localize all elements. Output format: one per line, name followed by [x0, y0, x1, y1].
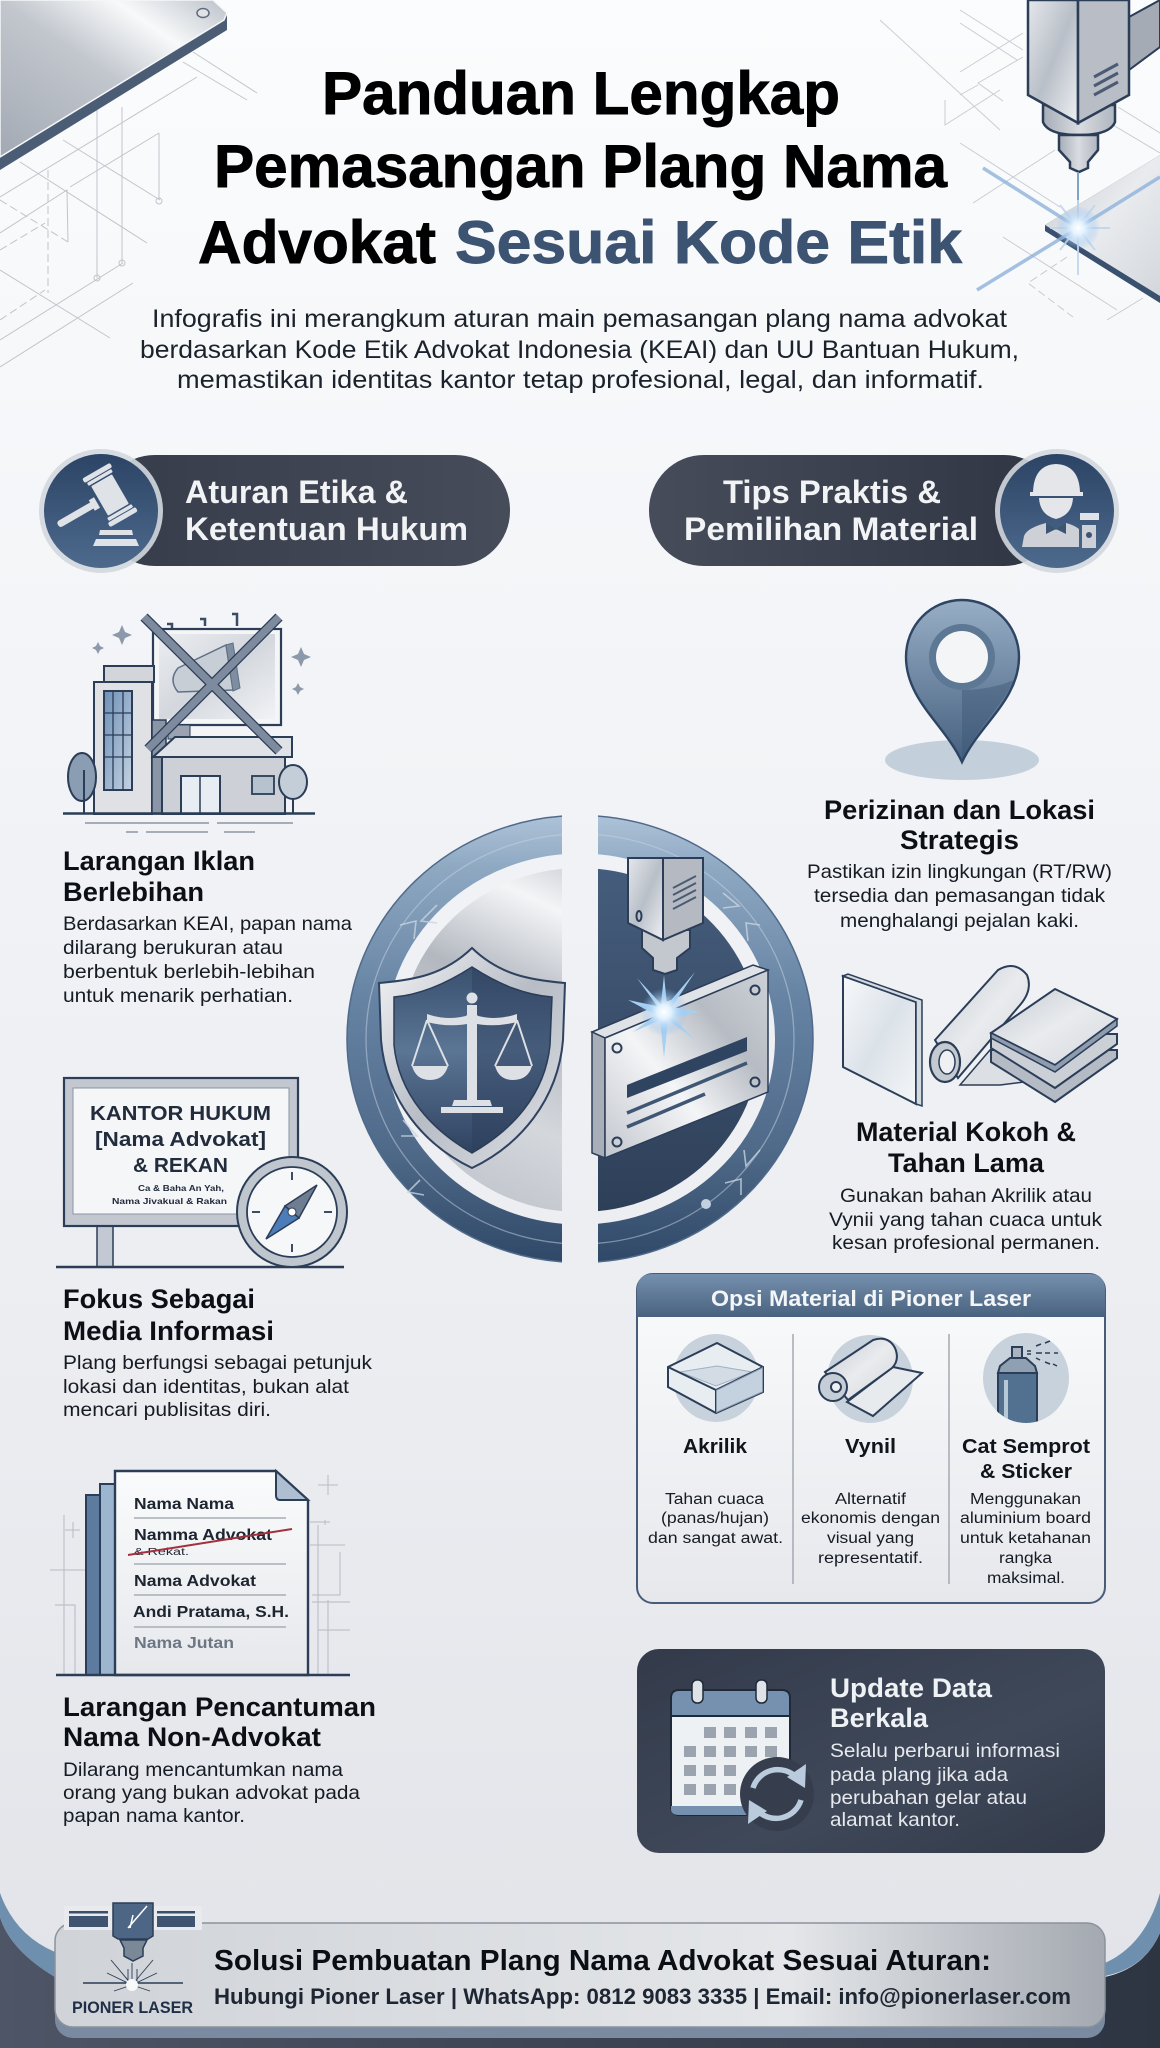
option: acrylic: Tahan cuaca — [665, 1491, 764, 1508]
text block: Larangan Iklan Berlebihan: Berdasarkan KEAI, papan nama — [63, 913, 352, 935]
option: acrylic — [648, 1334, 783, 1547]
panel: update data: Update Data — [830, 1673, 993, 1703]
engraved metal plate — [592, 965, 768, 1158]
option: spray paint and sticker: aluminium board — [960, 1510, 1091, 1527]
title: Sesuai Kode Etik — [455, 209, 963, 276]
icon: name list document: Nama Nama — [134, 1496, 234, 1513]
text block: Material Kokoh: Vynii yang tahan cuaca untuk — [829, 1209, 1102, 1231]
icon: location pin — [885, 600, 1039, 780]
icon: name list document: Nama Advokat — [134, 1573, 256, 1590]
option: acrylic: dan sangat awat. — [648, 1530, 783, 1547]
text block: Perizinan dan Lokasi Strategis: Pastikan izin lingkungan (RT/RW) — [807, 861, 1112, 883]
panel: update data: alamat kantor. — [830, 1809, 960, 1831]
title — [198, 60, 963, 276]
section header: Tips Praktis: Tips Praktis & — [723, 474, 941, 510]
text block: Larangan Iklan Berlebihan: Larangan Iklan — [63, 846, 255, 876]
icon: office sign with compass: KANTOR HUKUM — [90, 1103, 271, 1125]
icon: worker — [995, 449, 1119, 573]
icon: office sign with compass: Nama Jivakual & Rakan — [112, 1196, 227, 1206]
left half: ring and metal disc — [346, 815, 562, 1263]
option: spray paint and sticker: Cat Semprot — [962, 1436, 1090, 1458]
icon: name list document: Andi Pratama, S.H. — [133, 1604, 289, 1621]
text block: Fokus Sebagai Media Informasi — [63, 1284, 372, 1421]
laser nozzle: top right — [1028, 0, 1160, 172]
panel: update data: Selalu perbarui informasi — [830, 1740, 1060, 1762]
text block: Fokus Sebagai Media Informasi: mencari publisitas diri. — [63, 1399, 271, 1421]
laser head — [628, 858, 703, 974]
section header: Tips Praktis: Pemilihan Material — [684, 511, 978, 547]
metal plate: top left corner — [0, 0, 227, 170]
panel: update data: Berkala — [830, 1703, 929, 1733]
text block: Material Kokoh: Gunakan bahan Akrilik atau — [840, 1185, 1092, 1207]
icon: name list document — [50, 1471, 350, 1675]
blueprint lines: top left — [0, 52, 257, 367]
icon: office sign with compass — [56, 1078, 347, 1267]
text block: Larangan Pencantuman Nama Non-Advokat: orang yang bukan advokat pada — [63, 1782, 360, 1804]
text block: Larangan Pencantuman Nama Non-Advokat: papan nama kantor. — [63, 1805, 245, 1827]
section header: Aturan Etika: Ketentuan Hukum — [185, 511, 468, 547]
icon: office sign with compass: [Nama Advokat] — [95, 1129, 266, 1151]
text block: Material Kokoh: Tahan Lama — [888, 1148, 1045, 1178]
icon: crossed-out billboard on building — [63, 614, 315, 832]
option: spray paint and sticker: rangka — [999, 1550, 1052, 1567]
option: acrylic: Akrilik — [683, 1436, 748, 1458]
icon: office sign with compass: Ca & Baha An Yah, — [138, 1183, 224, 1193]
text block: Larangan Iklan Berlebihan: untuk menarik perhatian. — [63, 985, 293, 1007]
text block: Larangan Pencantuman Nama Non-Advokat — [63, 1692, 376, 1827]
logo: Pioner Laser: PIONER LASER — [72, 1998, 193, 2017]
logo: Pioner Laser — [64, 1903, 202, 2017]
intro text: Infografis ini merangkum aturan main pemasangan plang nama advokat — [152, 305, 1007, 333]
panel: update data: pada plang jika ada — [830, 1764, 1008, 1786]
option: acrylic: (panas/hujan) — [661, 1510, 769, 1527]
text block: Material Kokoh — [829, 1117, 1102, 1254]
panel heading: Opsi Material di Pioner Laser — [711, 1286, 1031, 1311]
footer plate — [55, 1923, 1105, 2038]
intro text: berdasarkan Kode Etik Advokat Indonesia (KEAI) dan UU Bantuan Hukum, — [140, 336, 1019, 364]
text block: Larangan Iklan Berlebihan: dilarang berukuran atau — [63, 937, 283, 959]
option: vinyl: ekonomis dengan — [801, 1510, 940, 1527]
icon: name list document: Nama Jutan — [134, 1635, 234, 1652]
text block: Perizinan dan Lokasi Strategis: Strategis — [900, 825, 1019, 855]
text block: Larangan Iklan Berlebihan: Berlebihan — [63, 877, 204, 907]
text block: Fokus Sebagai Media Informasi: lokasi dan identitas, bukan alat — [63, 1376, 350, 1398]
blueprint lines: top right — [880, 10, 1160, 320]
icon: name list document: Namma Advokat — [134, 1527, 272, 1544]
shield with scales — [379, 948, 565, 1168]
footer band — [0, 1893, 1160, 2048]
option: spray paint and sticker: untuk ketahanan — [960, 1530, 1091, 1547]
text block: Material Kokoh: Material Kokoh & — [856, 1117, 1076, 1147]
text block: Fokus Sebagai Media Informasi: Fokus Sebagai — [63, 1284, 255, 1314]
spark — [628, 972, 700, 1058]
text block: Larangan Iklan Berlebihan: berbentuk berlebih-lebihan — [63, 961, 315, 983]
center emblem: law and laser — [347, 816, 813, 1262]
intro text — [140, 305, 1019, 394]
option: spray paint and sticker: Menggunakan — [970, 1491, 1081, 1508]
text block: Larangan Pencantuman Nama Non-Advokat: Nama Non-Advokat — [63, 1722, 321, 1752]
text block: Perizinan dan Lokasi Strategis: menghalangi pejalan kaki. — [840, 910, 1079, 932]
text block: Fokus Sebagai Media Informasi: Plang berfungsi sebagai petunjuk — [63, 1352, 372, 1374]
panel: update data: perubahan gelar atau — [830, 1787, 1027, 1809]
intro text: memastikan identitas kantor tetap profesional, legal, dan informatif. — [177, 366, 984, 394]
panel: material options — [637, 1274, 1105, 1603]
panel: update data — [637, 1649, 1105, 1853]
option: vinyl — [801, 1335, 940, 1567]
option: vinyl: Alternatif — [835, 1491, 907, 1508]
option: vinyl: representatif. — [818, 1550, 923, 1567]
right half: ring and dark disc — [598, 815, 814, 1263]
footer text — [214, 1945, 1071, 2009]
option: spray paint and sticker: & Sticker — [980, 1461, 1072, 1483]
section header: Tips Praktis — [649, 449, 1119, 573]
footer text: Hubungi Pioner Laser | WhatsApp: 0812 9083 3335 | Email: info@pionerlaser.com — [214, 1984, 1071, 2009]
text block: Fokus Sebagai Media Informasi: Media Informasi — [63, 1316, 274, 1346]
option: spray paint and sticker — [960, 1333, 1091, 1587]
laser spark on plate: top right — [977, 155, 1160, 303]
section header: Aturan Etika: Aturan Etika & — [185, 474, 408, 510]
title: Panduan Lengkap — [322, 60, 840, 127]
text block: Perizinan dan Lokasi Strategis: Perizinan dan Lokasi — [824, 795, 1095, 825]
icon: name list document: & Rekat. — [134, 1547, 189, 1558]
title: Advokat — [198, 209, 436, 276]
text block: Larangan Pencantuman Nama Non-Advokat: Dilarang mencantumkan nama — [63, 1759, 343, 1781]
text block: Larangan Iklan Berlebihan — [63, 846, 352, 1007]
icon: material samples — [843, 966, 1117, 1106]
text block: Perizinan dan Lokasi Strategis — [807, 795, 1112, 932]
text block: Material Kokoh: kesan profesional permanen. — [832, 1232, 1100, 1254]
text block: Larangan Pencantuman Nama Non-Advokat: Larangan Pencantuman — [63, 1692, 376, 1722]
icon: office sign with compass: & REKAN — [133, 1155, 228, 1177]
footer text: Solusi Pembuatan Plang Nama Advokat Sesuai Aturan: — [214, 1945, 991, 1977]
option: vinyl: visual yang — [827, 1530, 914, 1547]
icon: calendar with refresh — [671, 1680, 814, 1831]
section header: Aturan Etika — [39, 449, 510, 573]
option: vinyl: Vynil — [845, 1436, 896, 1458]
icon: gavel — [39, 449, 163, 573]
option: spray paint and sticker: maksimal. — [987, 1570, 1065, 1587]
text block: Perizinan dan Lokasi Strategis: tersedia dan pemasangan tidak — [814, 885, 1105, 907]
title: Pemasangan Plang Nama — [214, 133, 948, 200]
